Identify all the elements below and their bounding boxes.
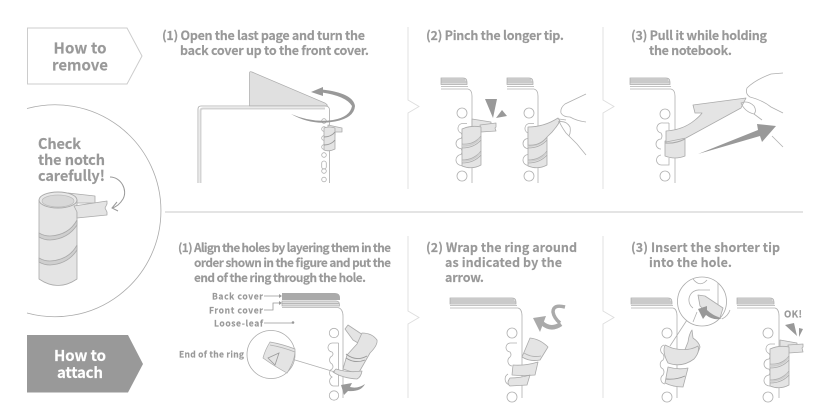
first spiral gap [39,220,77,240]
panel: attach step 1: Front cover [209,304,263,316]
holes and small ring [322,119,342,182]
panel: attach step 1: End of the ring [179,348,244,360]
icon: spiral ring with notch [39,192,107,286]
panel: attach step 2 [426,237,577,402]
callout circle outline [27,105,161,317]
panel: attach step 3: into the hole. [649,252,732,271]
panel: check the notch callout: carefully! [38,165,105,186]
illustration: pinch tip B with fingers [507,78,586,183]
leader lines [264,296,292,323]
panel: attach step 1: Loose-leaf [214,318,264,330]
panel: attach step 2: arrow. [445,267,484,286]
panel: attach step 1: end of the ring through the hole. [194,269,366,286]
illustration: pull ring [630,73,783,183]
stretched arm [666,98,746,142]
front tab with notch [74,201,107,218]
OK mark: OK! [784,306,802,320]
back tab [68,193,95,203]
divider [165,211,803,213]
second spiral gap [39,245,77,265]
ring segments [522,338,548,361]
magnifier [678,277,730,326]
step text: (3) Pull it while holding [631,25,768,44]
callout heading: Check [38,133,81,154]
label: how to remove: How to [54,38,106,58]
panel: attach step 1: order shown in the figure and put the [194,254,391,271]
step text: (1) Align the holes by layering them in the [178,239,391,256]
arrow: turn the cover [291,87,355,123]
step text: (3) Insert the shorter tip [631,237,780,256]
panel: check the notch callout: the notch [38,149,105,170]
arrow: points to notch [110,177,125,211]
illustration: insert tip [631,277,803,402]
lower ring [665,138,685,158]
step text: (2) Wrap the ring around [426,237,577,256]
step text: (2) Pinch the longer tip. [426,25,564,44]
labels: Back cover [212,290,263,302]
top opening [39,192,77,208]
panel: attach step 3 [631,237,803,402]
label: how to remove: remove [52,54,108,76]
panel: attach step 2: as indicated by the [445,252,562,271]
arrow: pull direction [698,124,776,154]
arrow [341,383,365,395]
magnifier [247,330,335,378]
panel: remove step 1 [162,25,369,183]
panel: remove step 3: the notebook. [649,40,732,59]
arrow: wrap direction [533,306,565,332]
tilted ring [333,325,377,379]
label: how to attach: attach [57,362,103,383]
label: how to attach [27,335,143,392]
step text: (1) Open the last page and turn the [162,25,365,44]
panel: remove step 1: back cover up to the front cover. [180,40,369,59]
notebook layers [282,293,340,300]
panel: attach step 1 [178,239,391,400]
fingers [746,73,783,113]
label: how to remove [28,28,142,84]
fingers [559,94,586,155]
illustration: finished ring [737,298,774,304]
panel: remove step 2 [426,25,586,183]
label: how to attach: How to [54,345,106,366]
illustration: wrap ring [450,298,565,402]
back cover flap [250,72,327,106]
ring: free end [684,330,700,356]
ring body [39,200,77,286]
panel: check the notch callout [27,105,161,317]
notebook outline [198,106,330,183]
panel: remove step 3 [630,25,783,183]
ring: lower body [665,367,688,387]
illustration: pinch tip A [441,78,507,183]
